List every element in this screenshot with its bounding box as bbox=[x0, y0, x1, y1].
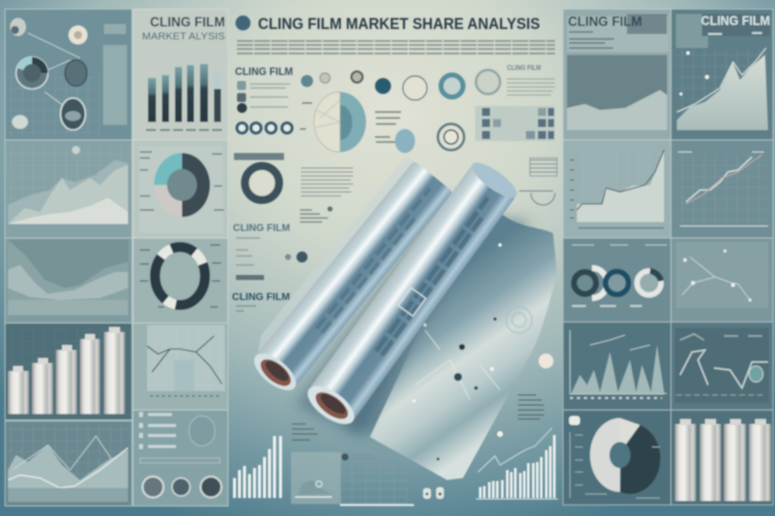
panel: center sidebar bits bbox=[232, 16, 557, 311]
panel: right scatter network bbox=[671, 238, 773, 322]
panel: left cylinder bar chart bbox=[5, 323, 132, 420]
icon list bbox=[237, 81, 290, 113]
heading: market alysis: MARKET ALYSIS bbox=[142, 30, 225, 42]
panel: right dark pie chart bbox=[563, 410, 671, 505]
pie callout labels bbox=[300, 103, 401, 142]
icons row top bbox=[301, 72, 391, 94]
bottom small chart bbox=[291, 452, 341, 504]
donut ring bbox=[234, 153, 284, 200]
panel: list and small rings bbox=[133, 410, 228, 506]
main pie chart bbox=[314, 92, 366, 152]
roll one bbox=[241, 155, 453, 397]
bottom centre bars bbox=[233, 436, 282, 498]
roll one end bbox=[248, 347, 302, 397]
icon row bbox=[237, 123, 292, 133]
sheet data marks bbox=[412, 243, 532, 460]
panel: line chart bbox=[133, 323, 228, 410]
bar series bbox=[148, 64, 221, 122]
heading: cling film: CLING FILM bbox=[150, 14, 225, 30]
panel: right peak chart bbox=[563, 322, 671, 410]
panel: right network map bbox=[671, 322, 773, 410]
small text block bbox=[507, 79, 555, 95]
gauge bbox=[519, 158, 557, 205]
roll two bbox=[302, 157, 522, 431]
panel: right middle line chart bbox=[671, 140, 773, 238]
list bbox=[139, 412, 176, 449]
panel: left mountain chart bbox=[5, 238, 132, 323]
panel: right top right area bbox=[671, 9, 773, 140]
panel: right donuts bbox=[563, 238, 671, 322]
sheet shadow bbox=[345, 215, 530, 440]
panel: bar chart with heading bbox=[133, 9, 228, 140]
panel: pie chart bbox=[133, 140, 228, 238]
text block bbox=[301, 168, 353, 196]
panel: right cylinders bbox=[671, 410, 773, 505]
intro text lines bbox=[237, 41, 555, 54]
heading: small cling film: CLING FILM bbox=[507, 65, 541, 72]
rings bbox=[142, 476, 222, 498]
roll shadow bbox=[296, 195, 480, 435]
panel: left orbit diagram bbox=[5, 9, 132, 140]
side text bbox=[518, 354, 554, 419]
bottom right bar chart bbox=[476, 428, 558, 499]
rings row bbox=[395, 70, 500, 153]
heading: cling film middle: CLING FILM bbox=[233, 222, 290, 234]
small text bbox=[300, 206, 332, 222]
heading: cling film light: CLING FILM bbox=[701, 14, 770, 28]
main title icon bbox=[236, 16, 250, 30]
panel: right top left area bbox=[563, 9, 671, 140]
panel: right middle area chart bbox=[563, 140, 671, 238]
bottom text note bbox=[292, 424, 318, 440]
panel: donut chart bbox=[133, 238, 228, 323]
main title: CLING FILM MARKET SHARE ANALYSIS bbox=[258, 16, 540, 33]
icon grid bbox=[475, 106, 555, 141]
roll two end bbox=[302, 379, 360, 431]
heading: cling film: CLING FILM bbox=[568, 14, 642, 29]
padlock icons bbox=[423, 487, 444, 499]
heading: cling film lower: CLING FILM bbox=[232, 291, 290, 303]
panel: left area chart bbox=[5, 140, 132, 238]
panel: left layered area chart bbox=[5, 421, 132, 506]
plastic sheet bbox=[370, 213, 557, 480]
bottom table bbox=[340, 454, 414, 506]
small list bbox=[236, 238, 308, 280]
heading: cling film: CLING FILM bbox=[235, 66, 293, 78]
